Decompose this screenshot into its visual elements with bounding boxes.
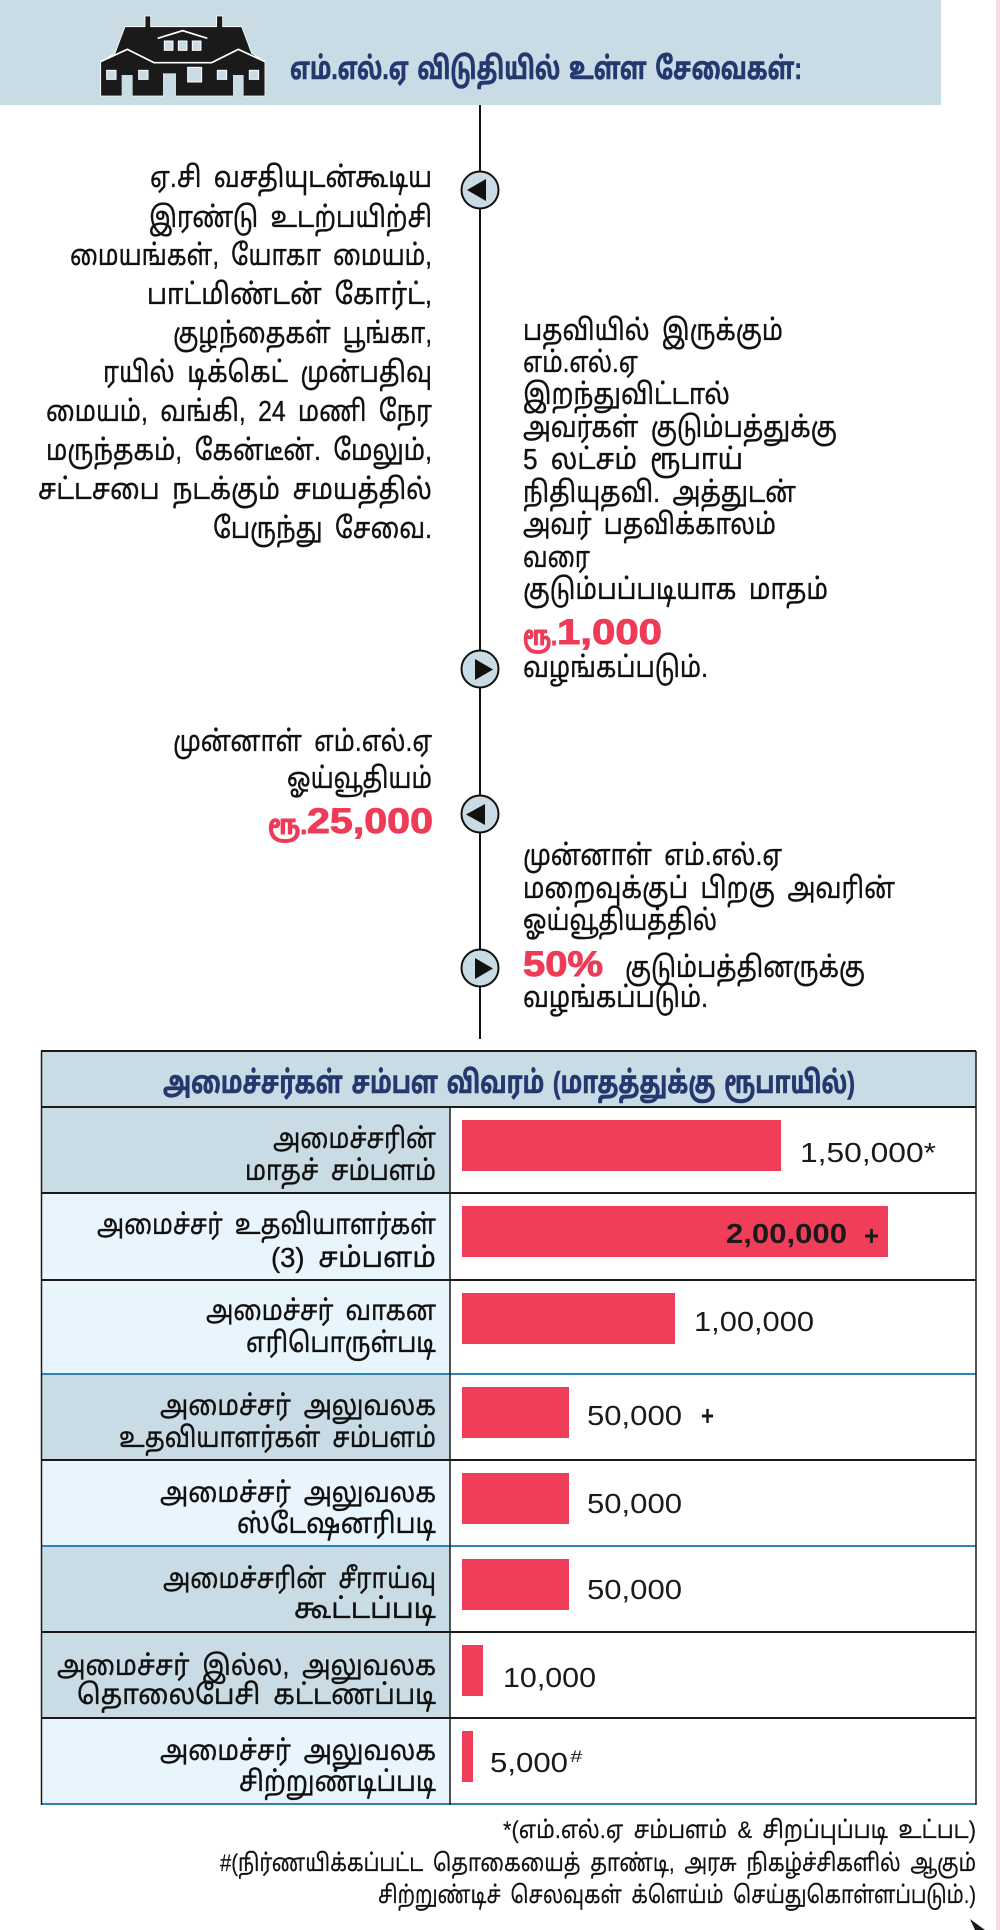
text block: family pension [523,840,895,1017]
text block: facilities: பேருந்து சேவை. [213,513,432,548]
amount: rs 1,000: ரூ. [523,621,557,654]
row 6 [163,1559,682,1626]
amount: rs 25,000: ரூ. [268,810,307,843]
row 8: 5,000 [490,1747,568,1778]
text block: family pension: முன்னாள் எம்.எல்.ஏ [523,840,782,874]
text block: family pension: குடும்பத்தினருக்கு [625,952,865,987]
row 2: அமைச்சர் உதவியாளர்கள் [97,1209,436,1243]
row 5: ஸ்டேஷனரிபடி [237,1508,436,1541]
amount: rs 1,000: 1,000 [557,613,662,652]
text block: family aid: பதவியில் இருக்கும் [523,315,783,350]
row 8: அமைச்சர் அலுவலக [160,1735,436,1769]
header band [0,0,941,105]
row 1 [245,1120,936,1189]
row 1: மாதச் சம்பளம் [245,1155,436,1189]
timeline line [479,105,481,1039]
row 8: சிற்றுண்டிப்படி [239,1766,436,1800]
text block: family pension: மறைவுக்குப் பிறகு அவரின் [523,873,895,907]
row 4: அமைச்சர் அலுவலக [160,1390,436,1424]
text block: family aid: வரை [523,542,590,574]
icon: hostel building [101,16,265,97]
text block: facilities: குழந்தைகள் பூங்கா, [173,318,432,353]
text block: facilities: மருந்தகம், கேன்டீன். மேலும், [46,435,432,470]
row 2: (3) சம்பளம் [271,1242,436,1273]
footnotes [220,1817,976,1911]
row 6: கூட்டப்படி [294,1593,436,1626]
text block: family aid: நிதியுதவி. அத்துடன் [523,477,796,511]
row 4 [119,1387,714,1456]
row 2: 2,00,000 [726,1218,847,1249]
row 4: 50,000 [587,1400,682,1431]
row 7: அமைச்சர் இல்ல, அலுவலக [57,1650,436,1684]
text block: family aid: குடும்பப்படியாக மாதம் [523,574,828,608]
table header [41,1051,976,1107]
text block: family aid: அவர்கள் குடும்பத்துக்கு [523,412,837,446]
heading: services: எம்.எல்.ஏ விடுதியில் உள்ள சேவைகள்: [290,51,802,89]
row 8 [160,1731,583,1800]
text block: family pension: ஓய்வூதியத்தில் [523,905,717,940]
text block: family pension: வழங்கப்படும். [523,982,708,1017]
corner mark [970,1919,985,1930]
text block: family aid: வழங்கப்படும். [523,652,708,687]
text block: facilities: மையங்கள், யோகா மையம், [70,240,432,272]
text block: facilities: பாட்மிண்டன் கோர்ட், [147,279,432,311]
row 5: அமைச்சர் அலுவலக [160,1477,436,1511]
row 4: + [701,1400,714,1431]
amount: rs 25,000: 25,000 [307,802,433,841]
text block: family aid: எம்.எல்.ஏ [523,347,638,379]
row 6: 50,000 [587,1574,682,1605]
text block: facilities: இரண்டு உடற்பயிற்சி [149,202,432,237]
amount: rs 25,000 [268,802,433,843]
text block: facilities [38,162,432,548]
text block: facilities: ஏ.சி வசதியுடன்கூடிய [150,162,432,196]
row 8: # [570,1747,583,1766]
amount: 50%: 50% [523,945,603,984]
row 7 [57,1645,596,1713]
text block: family aid: அவர் பதவிக்காலம் [523,509,776,543]
timeline marker: left 2 [462,796,498,832]
text block: family aid: இறந்துவிட்டால் [523,379,730,414]
row 1: 1,50,000* [800,1137,936,1168]
row 7: தொலைபேசி கட்டணப்படி [77,1679,436,1713]
row 3: எரிபொருள்படி [246,1327,436,1361]
timeline marker: right 1 [462,650,498,688]
text block: pension: முன்னாள் எம்.எல்.ஏ [173,726,432,760]
row 5: 50,000 [587,1488,682,1519]
timeline marker: right 2 [462,950,498,986]
table: minister salary details [41,1051,976,1805]
text block: facilities: மையம், வங்கி, 24 மணி நேர [46,396,432,430]
row 7: 10,000 [503,1662,596,1693]
text block: family aid [523,315,837,687]
timeline marker: left 1 [462,172,498,208]
row 1: அமைச்சரின் [273,1123,436,1154]
row backgrounds [41,1107,450,1804]
row 2: + [864,1220,879,1251]
row 3: 1,00,000 [694,1306,814,1337]
amount: rs 1,000 [523,613,662,654]
row 3: அமைச்சர் வாகன [206,1295,436,1326]
page edge strip [996,0,1000,1930]
text block: pension [173,726,433,843]
row 5 [160,1473,682,1541]
row 4: உதவியாளர்கள் சம்பளம் [119,1422,436,1456]
row 2 [97,1206,888,1273]
text block: pension: ஓய்வூதியம் [287,763,432,798]
text block: family aid: 5 லட்சம் ரூபாய் [523,444,743,479]
row 6: அமைச்சரின் சீராய்வு [163,1563,436,1596]
text block: facilities: ரயில் டிக்கெட் முன்பதிவு [103,357,432,391]
row 3 [206,1293,814,1361]
text block: facilities: சட்டசபை நடக்கும் சமயத்தில் [38,474,432,508]
